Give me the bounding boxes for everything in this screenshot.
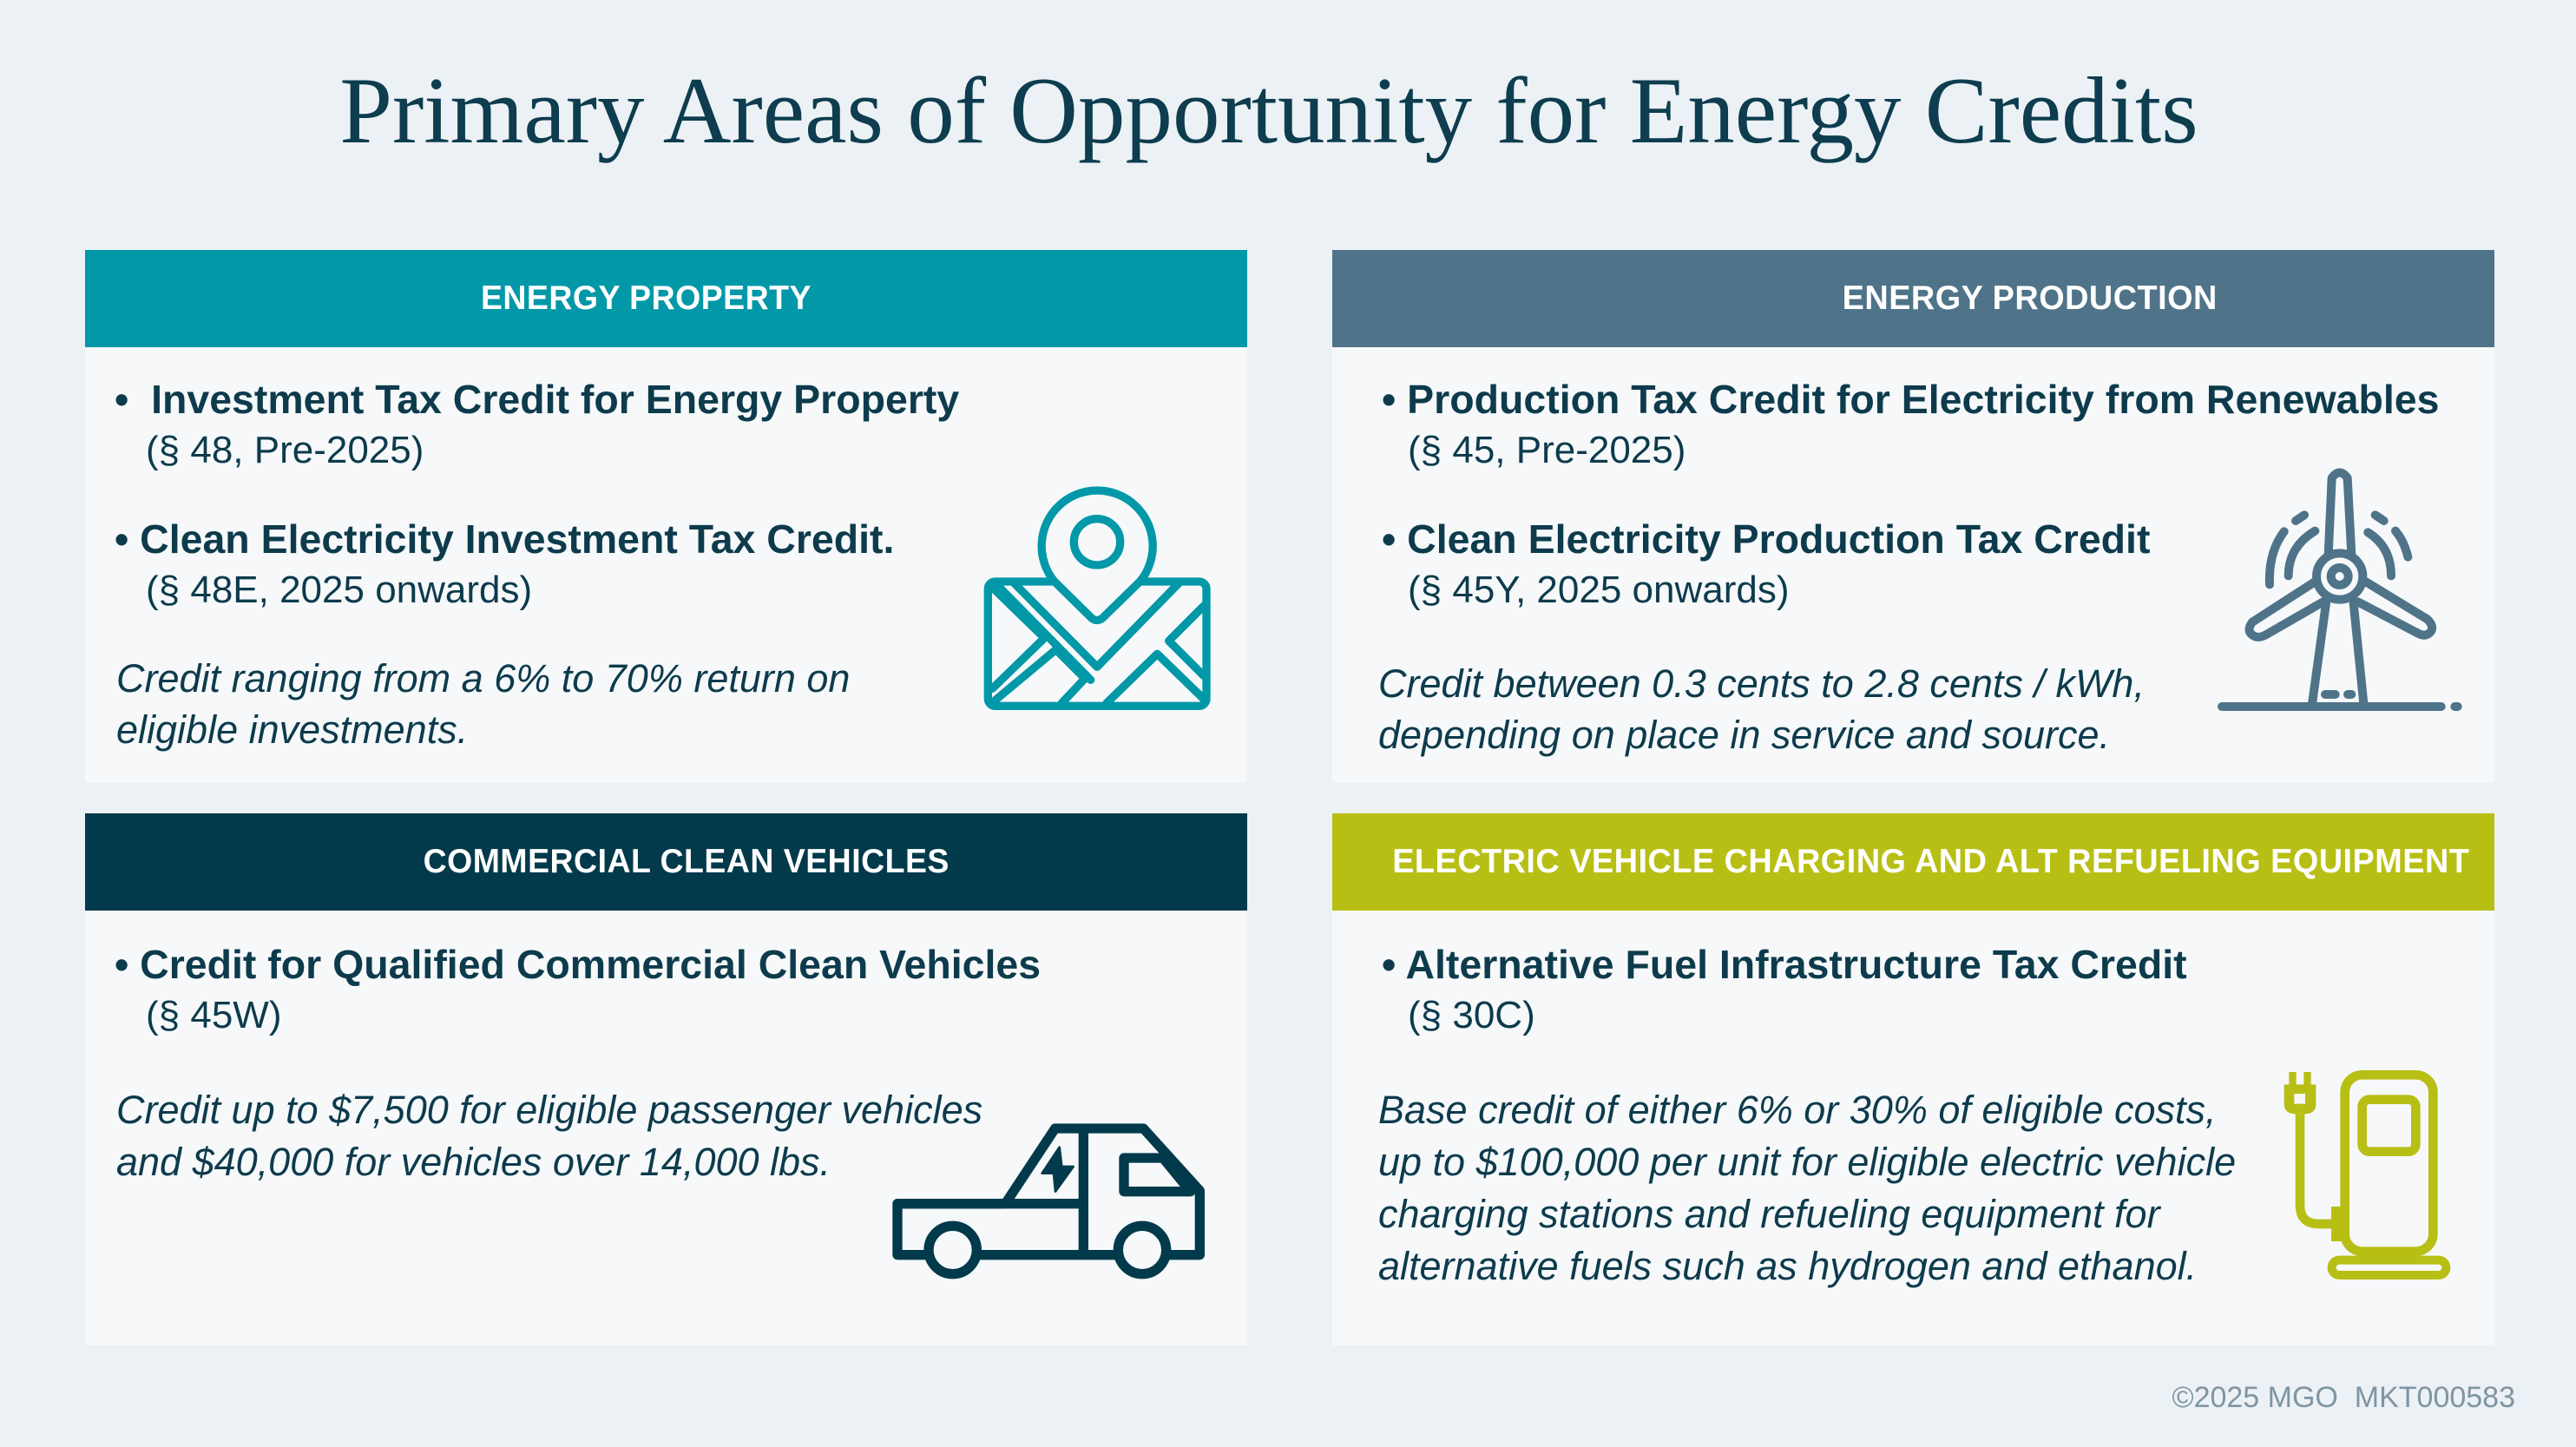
header: energy property [85, 250, 1247, 347]
title: Primary Areas of Opportunity for Energy Credits [339, 58, 2198, 163]
header: commercial clean vehicles [85, 813, 1247, 911]
bullet: • Alternative Fuel Infrastructure Tax Credit [1382, 942, 2187, 987]
description: charging stations and refueling equipment for [1378, 1192, 2160, 1236]
bullet 1: • Investment Tax Credit for Energy Property [115, 377, 959, 422]
footer credit: ©2025 MGO MKT000583 [2172, 1381, 2515, 1414]
bullet sub: (§ 30C) [1408, 994, 1535, 1036]
icon: electric truck [892, 1123, 1205, 1279]
description: Base credit of either 6% or 30% of eligible costs, [1378, 1088, 2217, 1132]
icon: wind turbine [2218, 469, 2462, 711]
bullet sub: (§ 45W) [146, 994, 281, 1036]
bullet 1: • Production Tax Credit for Electricity from Renewables [1382, 377, 2439, 422]
description: alternative fuels such as hydrogen and ethanol. [1378, 1244, 2197, 1288]
description: Credit between 0.3 cents to 2.8 cents / kWh, [1378, 661, 2145, 706]
description: up to $100,000 per unit for eligible electric vehicle [1378, 1140, 2236, 1184]
description [116, 656, 850, 752]
description: eligible investments. [116, 707, 468, 752]
header: energy production: ENERGY PRODUCTION [1842, 280, 2218, 317]
header: commercial clean vehicles: COMMERCIAL CLEAN VEHICLES [423, 843, 950, 880]
header: ev charging: ELECTRIC VEHICLE CHARGING AND ALT REFUELING EQUIPMENT [1392, 843, 2469, 880]
icon: map pin [984, 486, 1211, 710]
header: energy production [1332, 250, 2494, 347]
panel: energy production [1332, 250, 2494, 782]
header: ev charging [1332, 813, 2494, 911]
bullet 2: • Clean Electricity Production Tax Credit [1382, 516, 2150, 562]
description: Credit up to $7,500 for eligible passenger vehicles [116, 1088, 982, 1132]
panel: energy property [85, 250, 1247, 782]
description: Credit ranging from a 6% to 70% return on [116, 656, 850, 700]
bullet 2 sub: (§ 48E, 2025 onwards) [146, 569, 532, 611]
description [1378, 1088, 2236, 1288]
bullet 2 sub: (§ 45Y, 2025 onwards) [1408, 569, 1789, 611]
header: energy property: ENERGY PROPERTY [481, 280, 812, 317]
bullet: • Credit for Qualified Commercial Clean Vehicles [115, 942, 1041, 987]
description: depending on place in service and source. [1378, 713, 2110, 757]
icon: charging station [2284, 1070, 2451, 1279]
panel: ev charging [1332, 813, 2494, 1345]
description [1378, 661, 2145, 757]
bullet 1 sub: (§ 48, Pre-2025) [146, 429, 424, 471]
panel: commercial clean vehicles [85, 813, 1247, 1345]
description [116, 1088, 982, 1184]
description: and $40,000 for vehicles over 14,000 lbs. [116, 1140, 831, 1184]
bullet 2: • Clean Electricity Investment Tax Credit. [115, 516, 894, 562]
bullet 1 sub: (§ 45, Pre-2025) [1408, 429, 1686, 471]
